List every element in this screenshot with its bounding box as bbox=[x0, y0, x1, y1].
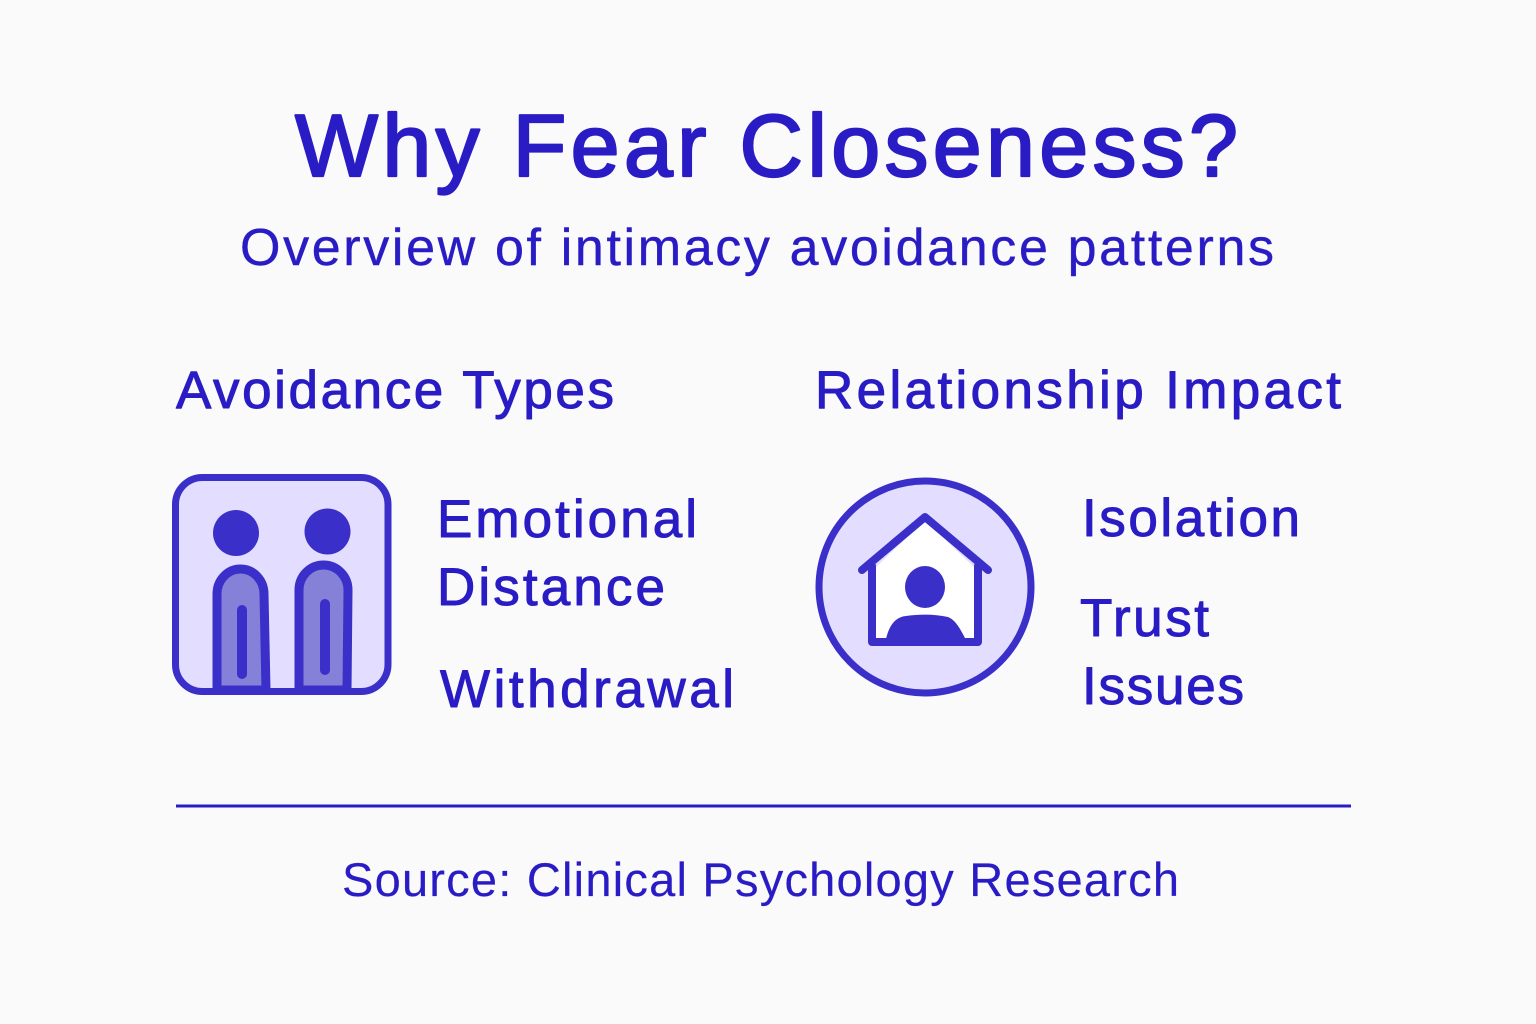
heading: avoidance types: Avoidance Types bbox=[176, 361, 614, 420]
label: trust issues: Trust bbox=[1080, 589, 1209, 648]
label: emotional distance: Distance bbox=[437, 558, 665, 617]
icon: person in house bbox=[819, 481, 1031, 693]
panel: relationship impact bbox=[815, 361, 1341, 716]
label: emotional distance bbox=[437, 490, 697, 617]
label: trust issues: Issues bbox=[1082, 657, 1244, 716]
title: Why Fear Closeness? bbox=[295, 96, 1238, 195]
label: emotional distance: Emotional bbox=[437, 490, 697, 549]
source note: Source: Clinical Psychology Research bbox=[342, 853, 1179, 906]
icon: two people bbox=[176, 478, 388, 692]
subtitle: Overview of intimacy avoidance patterns bbox=[240, 219, 1274, 277]
label: trust issues bbox=[1080, 589, 1244, 716]
heading: relationship impact: Relationship Impact bbox=[815, 361, 1341, 420]
panel: avoidance types bbox=[176, 361, 734, 719]
label: withdrawal: Withdrawal bbox=[440, 660, 734, 719]
label: isolation: Isolation bbox=[1082, 489, 1300, 548]
